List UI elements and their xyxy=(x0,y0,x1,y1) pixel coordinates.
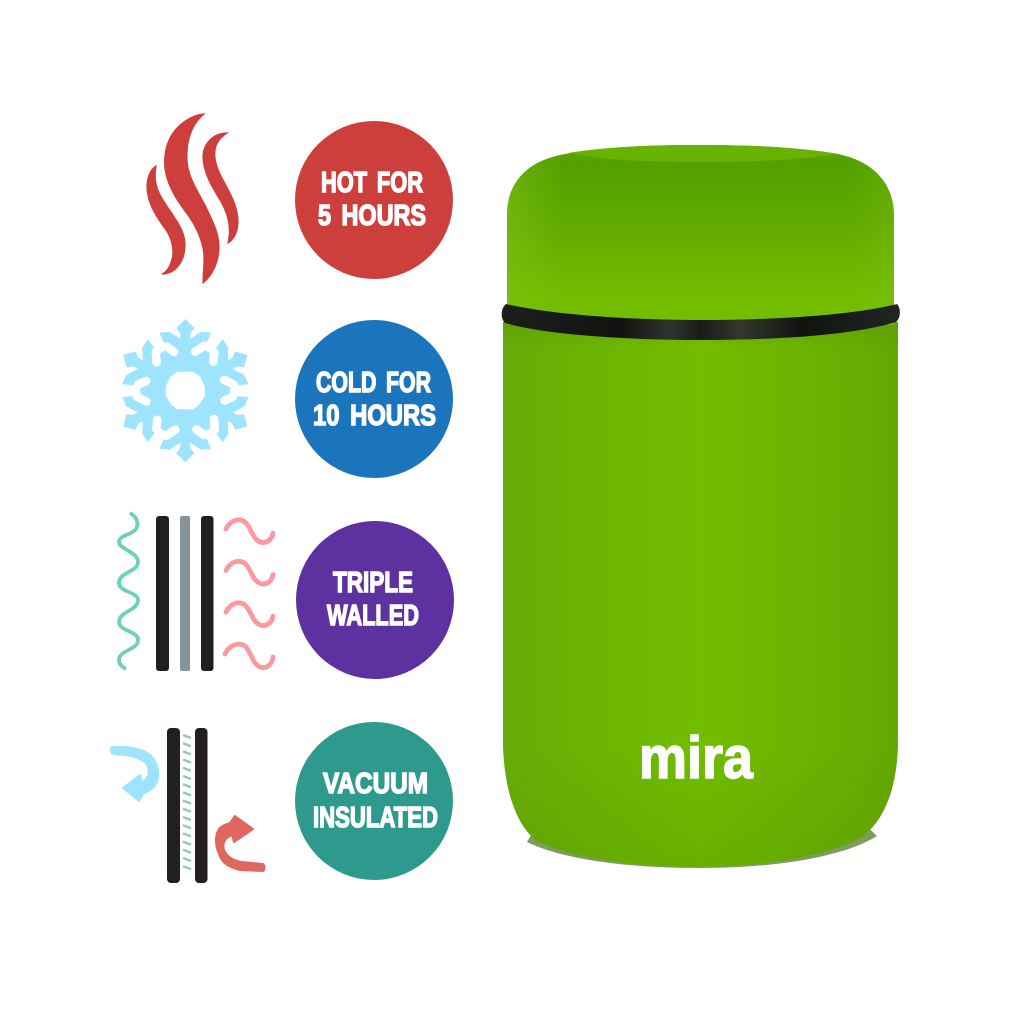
badge: triple walled: TRIPLE xyxy=(333,567,413,599)
badge: vacuum insulated xyxy=(295,722,453,880)
jar body xyxy=(503,322,898,867)
badge: triple walled: WALLED xyxy=(327,600,419,632)
badge: vacuum insulated: INSULATED xyxy=(313,802,438,834)
badge: triple walled xyxy=(296,521,454,679)
icon: vacuum layer with arrows xyxy=(111,728,264,883)
product: green insulated food jar xyxy=(502,145,900,868)
bottom shadow xyxy=(527,820,877,868)
icon: snowflake xyxy=(110,319,260,462)
badge: cold for 10 hours xyxy=(295,320,453,478)
badge: cold for 10 hours: 10 HOURS xyxy=(313,400,436,432)
badge: hot for 5 hours: HOT FOR xyxy=(321,167,423,199)
lid top rim xyxy=(568,145,838,162)
icon: triple walls with waves xyxy=(119,513,273,671)
logo: mira: mira xyxy=(639,725,754,791)
badge: hot for 5 hours xyxy=(295,121,453,279)
badge: vacuum insulated: VACUUM xyxy=(323,768,428,800)
black ring xyxy=(502,304,900,340)
icon: heat waves xyxy=(147,114,238,283)
badge: hot for 5 hours: 5 HOURS xyxy=(318,200,426,232)
badge: cold for 10 hours: COLD FOR xyxy=(316,367,431,399)
jar lid xyxy=(507,145,894,325)
